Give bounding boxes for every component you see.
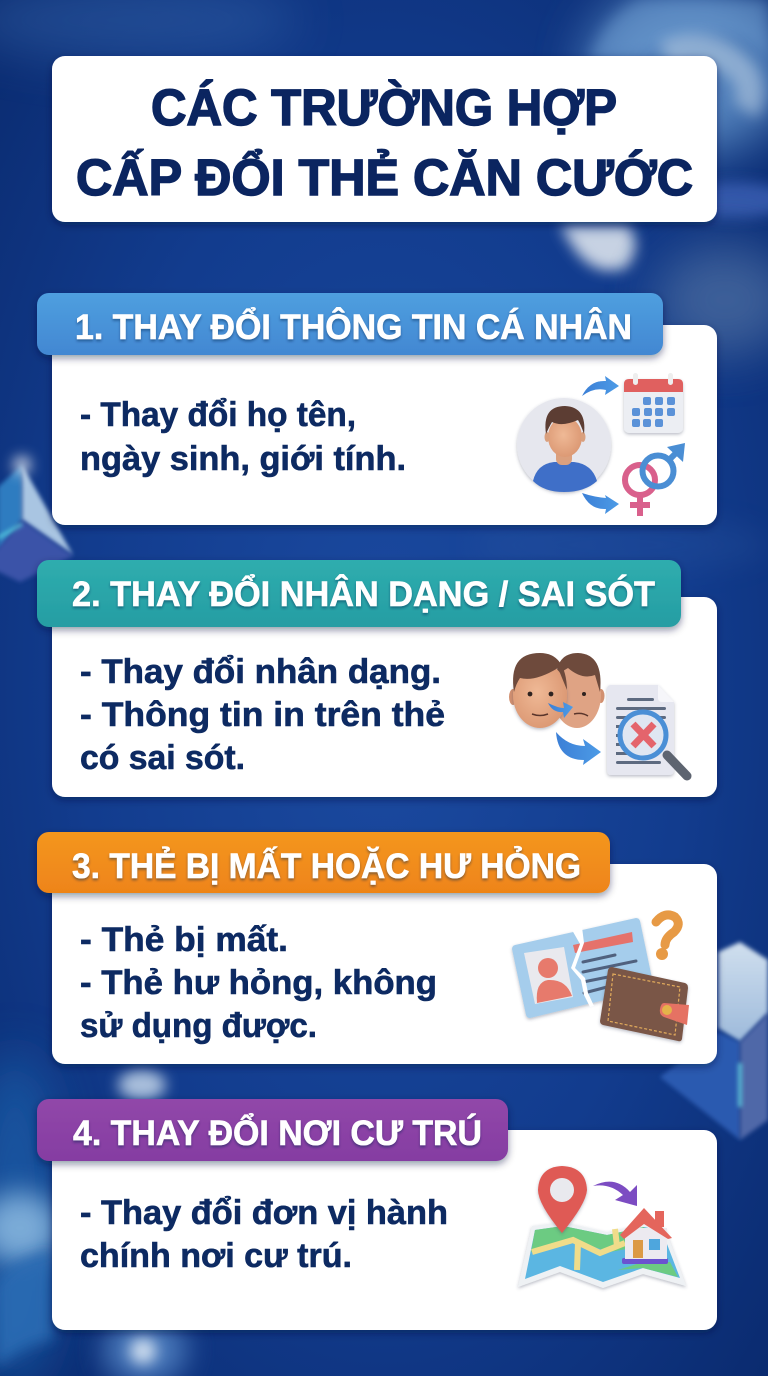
panel 3: lost or damaged card xyxy=(37,832,717,1064)
panel 2 text: có sai sót. xyxy=(80,739,245,777)
title text: CẤP ĐỔI THẺ CĂN CƯỚC xyxy=(76,148,693,206)
decorative cube left xyxy=(0,457,73,582)
icon: map with pin and house xyxy=(518,1166,686,1288)
panel 1 text: - Thay đổi họ tên, xyxy=(80,396,356,434)
panel 3 text: - Thẻ hư hỏng, không xyxy=(80,964,437,1002)
panel 2 text xyxy=(80,653,445,777)
title card xyxy=(52,56,717,222)
panel 2 text: - Thay đổi nhân dạng. xyxy=(80,653,441,691)
panel 4 header xyxy=(37,1099,508,1161)
decorative orb bottom left xyxy=(0,1050,187,1376)
panel 1 text xyxy=(80,396,406,478)
panel 4 text: chính nơi cư trú. xyxy=(80,1237,352,1275)
panel 3 text: sử dụng được. xyxy=(80,1007,317,1045)
panel 2: identity change and errors xyxy=(37,560,717,797)
panel 4 header: 4. THAY ĐỔI NƠI CƯ TRÚ xyxy=(73,1113,482,1153)
panel 1 header xyxy=(37,293,663,355)
icon: two faces and document with magnifier xyxy=(509,653,687,776)
panel 2 header: 2. THAY ĐỔI NHÂN DẠNG / SAI SÓT xyxy=(72,574,655,614)
icon: torn ID card, wallet and question mark xyxy=(512,915,689,1041)
decorative cube right xyxy=(660,942,768,1140)
panel 4: change of residence xyxy=(37,1099,717,1330)
panel 2 text: - Thông tin in trên thẻ xyxy=(80,696,445,734)
panel 4 text xyxy=(80,1194,448,1275)
panel 3 text xyxy=(80,921,437,1045)
panel 1: personal information xyxy=(37,293,717,525)
icon: person, calendar and gender symbols xyxy=(517,373,685,516)
panel 1 text: ngày sinh, giới tính. xyxy=(80,440,406,478)
panel 4 text: - Thay đổi đơn vị hành xyxy=(80,1194,448,1232)
panel 1 header: 1. THAY ĐỔI THÔNG TIN CÁ NHÂN xyxy=(75,307,632,347)
panel 3 header: 3. THẺ BỊ MẤT HOẶC HƯ HỎNG xyxy=(72,846,581,886)
panel 3 text: - Thẻ bị mất. xyxy=(80,921,288,959)
title text: CÁC TRƯỜNG HỢP xyxy=(151,79,617,136)
panel 3 header xyxy=(37,832,610,893)
panel 2 header xyxy=(37,560,681,627)
title text xyxy=(76,79,693,206)
